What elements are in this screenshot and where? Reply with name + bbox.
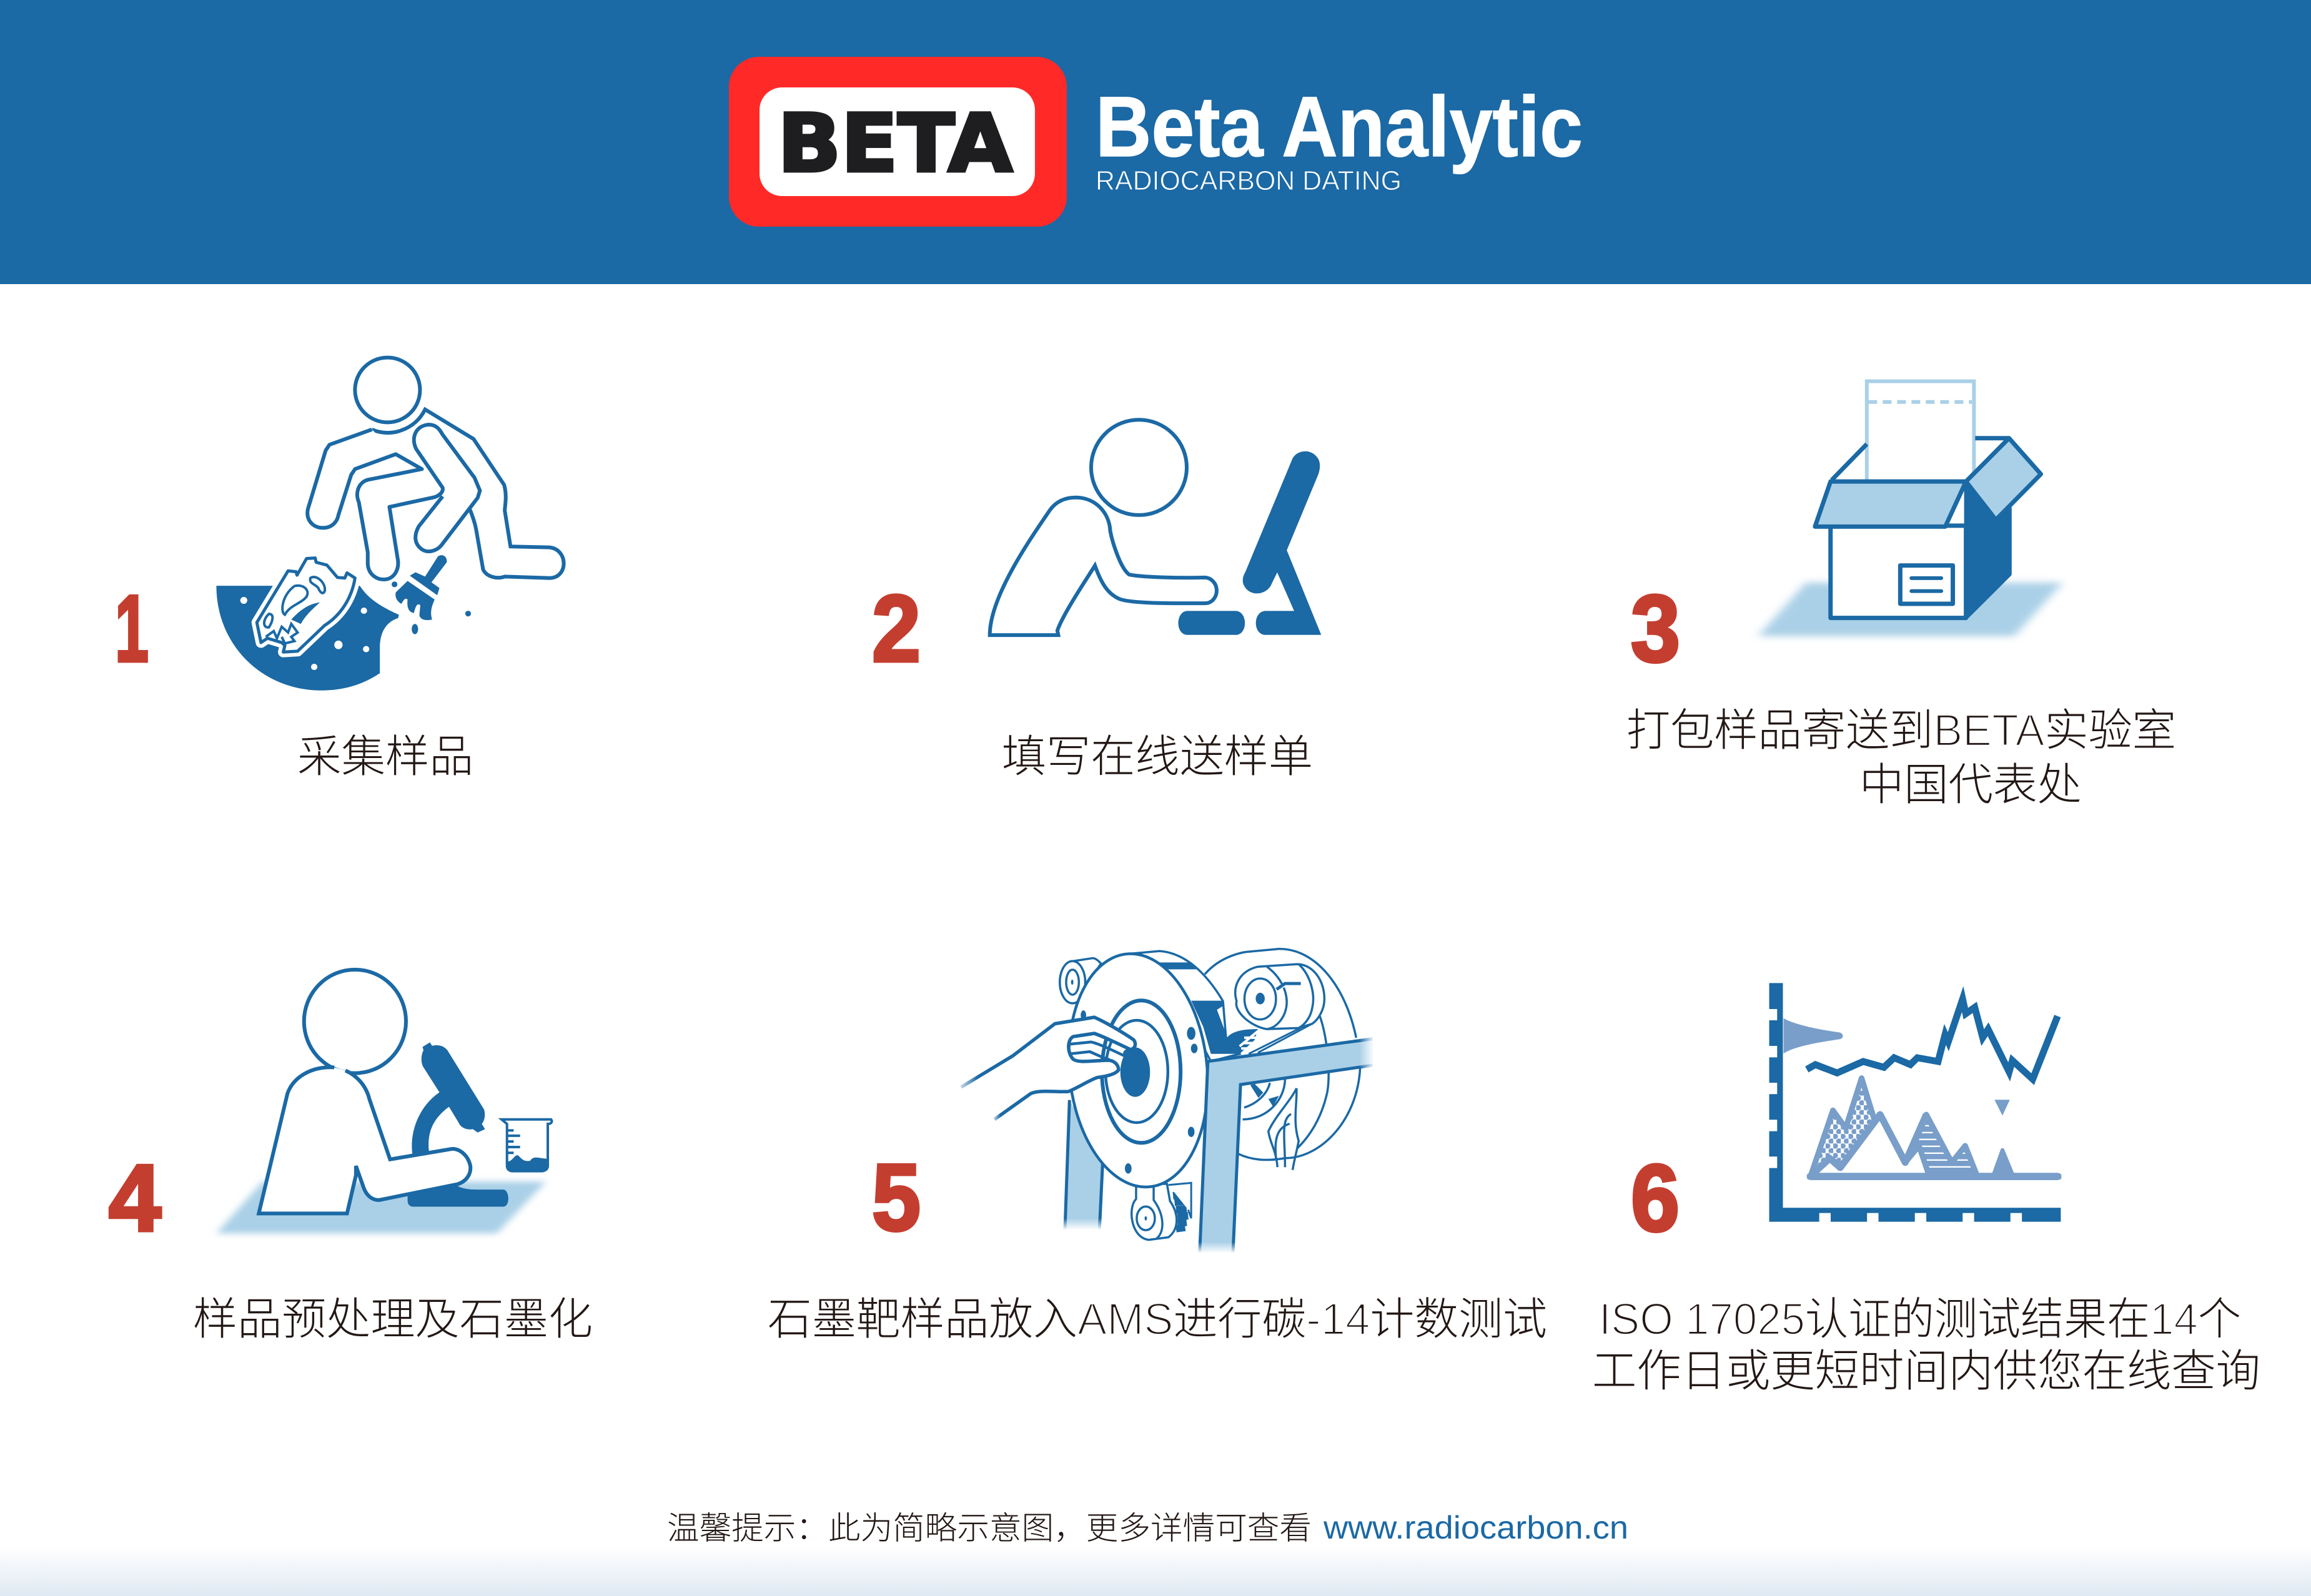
computer monitor [1243,451,1321,635]
back disk [1205,949,1360,1170]
step 3 number: 3 [1631,576,1680,682]
soil specks [240,597,369,670]
small upper-left wheel [1060,958,1101,1003]
step 5 label: 石墨靶样品放入AMS进行碳-14计数测试 [768,1295,1547,1344]
gear teeth [1227,1023,1312,1054]
step 3 label [1626,706,2176,810]
microscope [408,1042,508,1206]
beaker [502,1120,552,1171]
step 4 number: 4 [109,1145,161,1251]
bottom gradient strip [0,1547,2311,1596]
step 6 label: 工作日或更短时间内供您在线查询 [1592,1347,2260,1396]
step 4 icon: person at microscope [216,970,552,1233]
step 6 number: 6 [1631,1145,1680,1251]
rear hub cylinder [1235,964,1324,1029]
step 5 number: 5 [872,1145,921,1251]
step 1 label: 采集样品 [297,732,473,782]
distribution curve [1784,1018,1843,1053]
footer note [667,1510,1628,1546]
footer note: www.radiocarbon.cn [1323,1510,1628,1546]
keyboard [1178,611,1245,635]
logo wordmark: RADIOCARBON DATING [1096,165,1402,196]
form paper [1867,382,1974,480]
step 4 label: 样品预处理及石墨化 [193,1295,593,1344]
bottom gear wheel [1132,1183,1191,1240]
axes [1769,983,2061,1222]
step 2 number: 2 [872,576,921,682]
logo wordmark: Beta Analytic [1096,79,1583,175]
box front [1831,526,1966,618]
mountain profiles [1811,1078,2012,1176]
marker [1994,1100,2010,1116]
step 1 icon: collecting fossil sample [216,358,564,691]
left post [1059,1100,1105,1230]
rotor rim [1129,951,1240,1062]
baseline [1807,1173,2061,1180]
data line [1807,999,2057,1079]
step 3 label: 打包样品寄送到BETA实验室 [1626,706,2176,756]
step 1 number: 1 [115,576,149,682]
main disk [1060,951,1216,1190]
header band [0,0,2311,284]
frame [1194,1035,1374,1253]
box side [1966,483,2010,618]
address label [1900,566,1953,604]
step 3 label: 中国代表处 [1859,761,2082,810]
step 6 icon: results chart [1769,983,2061,1222]
person kneeling [307,358,564,579]
logo: BETA badge [729,57,1067,227]
step 6 label: ISO 17025认证的测试结果在14个 [1599,1295,2241,1344]
footer note: 温馨提示：此为简略示意图，更多详情可查看 [667,1510,1312,1546]
step 5 icon: loading target into AMS [955,949,1374,1253]
person [259,970,470,1213]
step 3 icon: packaged box [1758,382,2063,636]
step 6 label [1592,1295,2260,1396]
logo: BETA badge: BETA [778,97,1012,190]
hand [955,1017,1136,1121]
ground with fossil pit [216,586,399,691]
floor shadow [1758,583,2063,636]
left flap [1815,481,1966,526]
step 2 label: 填写在线送样单 [1002,732,1313,782]
step 2 icon: person at computer [990,420,1321,635]
bench [216,1181,546,1233]
dinosaur skull [257,558,355,652]
brush [392,555,471,634]
right flap [1966,438,2041,520]
